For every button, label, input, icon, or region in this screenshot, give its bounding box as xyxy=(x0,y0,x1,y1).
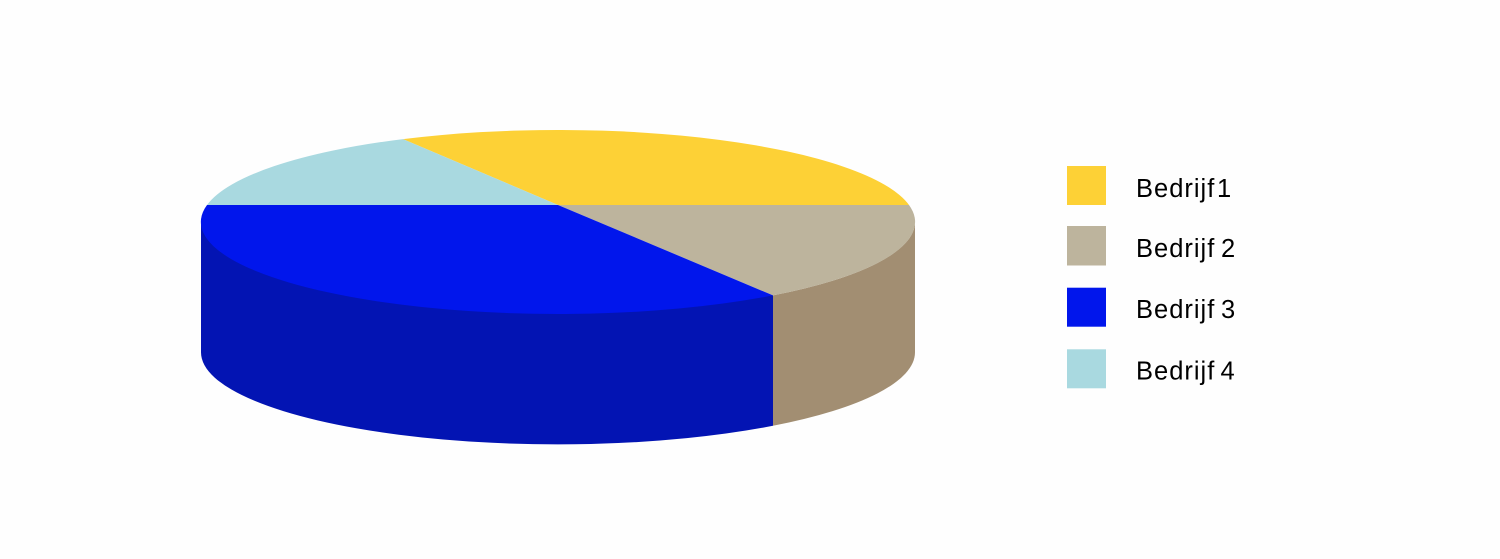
legend xyxy=(1067,166,1235,388)
legend item: Bedrijf 2: Bedrijf xyxy=(1136,235,1215,263)
legend item: Bedrijf 1: 1 xyxy=(1217,175,1231,203)
legend item: Bedrijf 3 xyxy=(1067,288,1235,327)
legend item: Bedrijf 4: Bedrijf xyxy=(1136,358,1215,386)
legend item: Bedrijf 1: Bedrijf xyxy=(1136,175,1215,203)
top slice: Bedrijf 1 xyxy=(403,130,909,205)
legend item: Bedrijf 3: 3 xyxy=(1221,296,1235,324)
legend item: Bedrijf 2: 2 xyxy=(1221,235,1235,263)
side wall: Bedrijf 2 xyxy=(773,222,915,426)
legend item: Bedrijf 4: 4 xyxy=(1220,358,1235,386)
top slice: Bedrijf 3 xyxy=(201,205,773,314)
legend item: Bedrijf 1 xyxy=(1067,166,1231,205)
legend item: Bedrijf 2 xyxy=(1067,226,1235,266)
3D pie chart xyxy=(201,130,915,444)
top slice: Bedrijf 4 xyxy=(207,139,558,205)
legend item: Bedrijf 3: Bedrijf xyxy=(1136,296,1215,324)
legend item: Bedrijf 4 xyxy=(1067,349,1235,388)
top slice: Bedrijf 2 xyxy=(558,205,915,295)
side wall: Bedrijf 3 xyxy=(201,222,773,444)
